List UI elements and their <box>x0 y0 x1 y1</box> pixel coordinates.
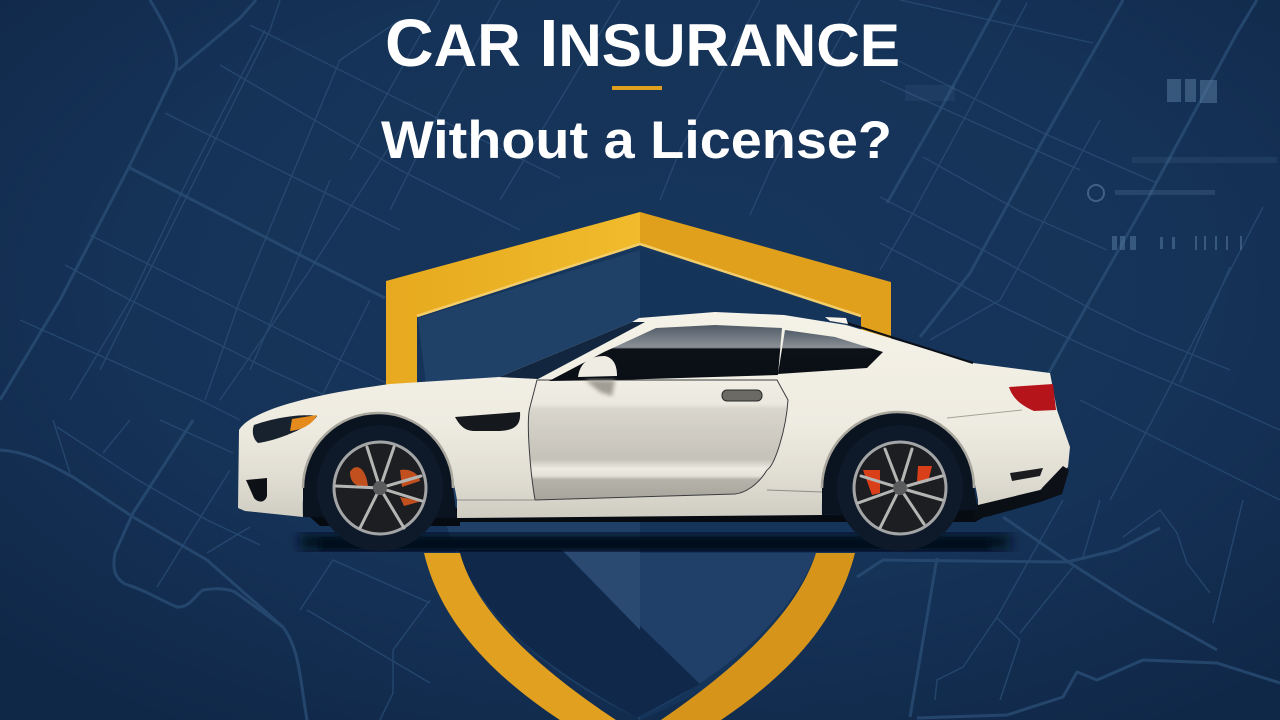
car: windshield <box>499 322 645 379</box>
car: rear wheel arch <box>822 412 978 515</box>
shield: gold frame lower left <box>424 553 622 720</box>
car: front wheel arch <box>303 413 457 518</box>
shield: gold frame upper right <box>640 212 891 400</box>
car: front wheel <box>317 425 443 551</box>
car: body <box>238 312 1070 518</box>
shield: gold frame upper left <box>386 212 640 400</box>
car: rear deck edge <box>847 323 973 363</box>
title line one: CAR INSURANCE <box>385 6 900 81</box>
car: door handle <box>722 390 762 401</box>
car: side window <box>549 325 782 381</box>
car: rocker crease <box>457 490 822 500</box>
car: rear arch trim <box>822 412 974 488</box>
shield <box>386 212 891 720</box>
title <box>381 6 900 170</box>
car: rear reflector <box>1010 468 1043 481</box>
car: headlight <box>253 415 317 443</box>
car: door panel <box>528 380 788 500</box>
shield: gold frame lower right <box>655 553 855 720</box>
car <box>238 312 1070 551</box>
car: side vent <box>455 412 520 431</box>
car: front bumper intake <box>246 478 267 502</box>
gold divider <box>612 86 662 90</box>
title line two: Without a License? <box>381 111 892 170</box>
car: rear diffuser shadow <box>972 490 1062 520</box>
car: rear quarter crease <box>947 410 1022 418</box>
car: rear window <box>778 330 883 374</box>
shield: gold bevel <box>417 244 861 316</box>
car: mirror shadow <box>585 380 615 396</box>
car: rear wheel <box>837 425 963 551</box>
car: tail light <box>1009 384 1056 411</box>
car: wing mirror <box>578 356 617 377</box>
car shadow <box>300 534 1010 550</box>
car: exhaust <box>1040 466 1069 500</box>
car: spoiler lip <box>825 317 848 324</box>
car: underbody <box>300 508 1000 526</box>
car: front arch trim <box>303 413 453 488</box>
shield: inner panels <box>418 250 860 720</box>
